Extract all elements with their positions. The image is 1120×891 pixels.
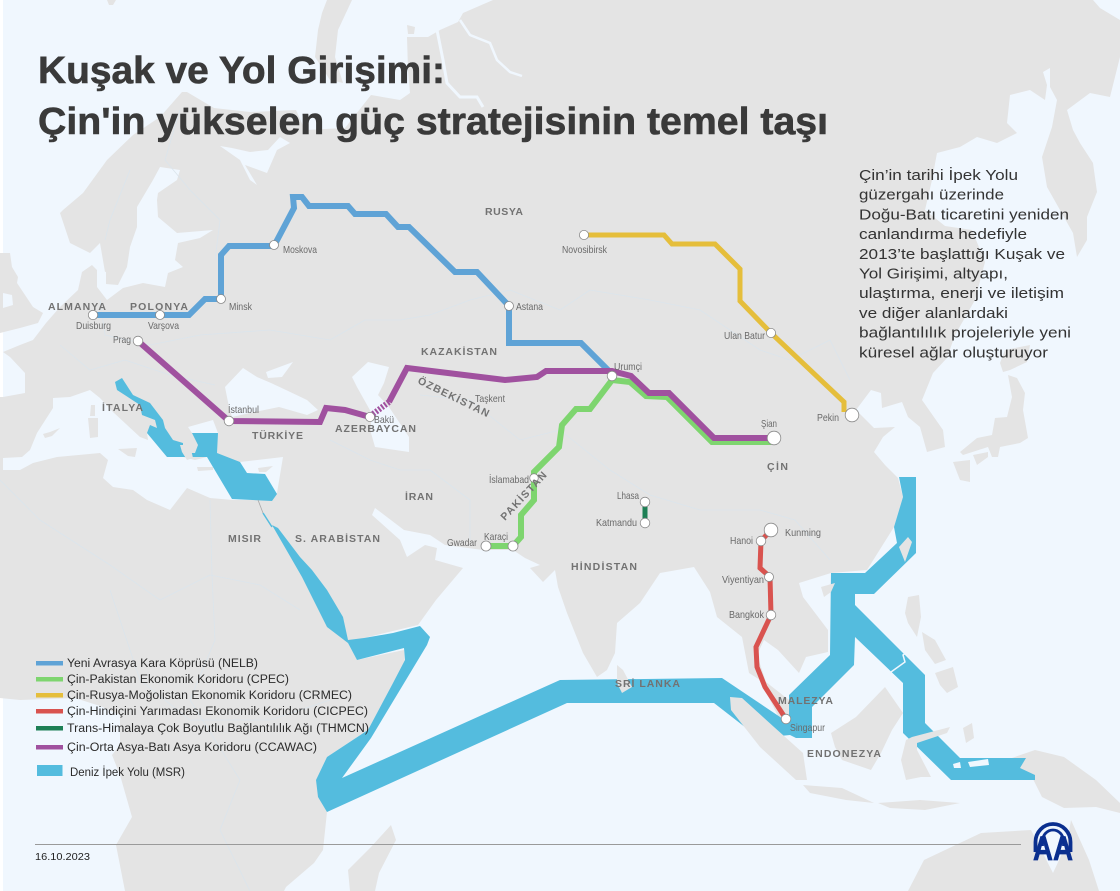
country labels: İRAN [405, 490, 433, 503]
route: CCAWAC [138, 341, 370, 422]
legend item: MSR [37, 765, 185, 779]
city labels: Katmandu [596, 517, 637, 529]
legend item: CPEC: Çin-Pakistan Ekonomik Koridoru (CPEC) [67, 674, 289, 686]
corridor routes [93, 197, 844, 719]
date: 16.10.2023 [35, 851, 90, 863]
legend item: MSR: Deniz İpek Yolu (MSR) [70, 766, 185, 779]
country labels: ALMANYA [48, 301, 106, 313]
city labels: Duisburg [76, 320, 111, 332]
route: CRMEC [584, 235, 844, 412]
country labels [48, 206, 881, 760]
intro text block: Doğu-Batı ticaretini yeniden [859, 206, 1069, 223]
maritime silk road (MSR) band [115, 378, 1035, 812]
city labels: İstanbul [228, 403, 259, 416]
legend [36, 658, 369, 779]
city labels: Şian [761, 418, 777, 430]
icon: AA logo: AA [1033, 830, 1073, 868]
city labels: Prag [113, 334, 131, 346]
country labels: POLONYA [130, 301, 188, 313]
legend item: CICPEC: Çin-Hindiçini Yarımadası Ekonomik Koridoru (CICPEC) [67, 706, 368, 718]
intro text block: güzergahı üzerinde [859, 187, 1004, 204]
title: Kuşak ve Yol Girişimi: [38, 50, 445, 92]
intro text block: ulaştırma, enerji ve iletişim [859, 285, 1064, 302]
city labels: İslamabad [489, 473, 529, 486]
city labels: Karaçi [484, 531, 508, 543]
city labels: Bakü [374, 414, 394, 426]
title [38, 50, 828, 143]
intro text block [859, 166, 1071, 361]
country labels: KAZAKİSTAN [421, 345, 497, 358]
country labels: ÖZBEKİSTAN [416, 374, 491, 420]
city labels: Kunming [785, 527, 821, 539]
country labels: S. ARABİSTAN [295, 532, 380, 545]
country labels: SRİ LANKA [615, 677, 680, 690]
intro text block: küresel ağlar oluşturuyor [859, 344, 1048, 361]
city labels: Astana [516, 301, 543, 313]
country labels: PAKİSTAN [498, 469, 549, 523]
city labels: Gwadar [447, 537, 477, 549]
route: CCAWAC hatched sea crossing [373, 402, 389, 414]
intro text block: 2013’te başlattığı Kuşak ve [859, 246, 1065, 263]
country labels: MALEZYA [778, 695, 833, 707]
intro text block: Çin’in tarihi İpek Yolu [859, 166, 1018, 184]
legend item: CCAWAC: Çin-Orta Asya-Batı Asya Koridoru (CCAWAC) [67, 742, 317, 754]
city labels: Hanoi [730, 535, 753, 547]
country labels: ENDONEZYA [807, 748, 881, 760]
intro text block: ve diğer alanlardaki [859, 305, 1008, 322]
title: Çin'in yükselen güç stratejisinin temel taşı [38, 101, 828, 143]
city labels: Singapur [790, 722, 825, 734]
city labels: Novosibirsk [562, 244, 608, 256]
legend item: CRMEC: Çin-Rusya-Moğolistan Ekonomik Koridoru (CRMEC) [67, 690, 352, 702]
route: CICPEC [756, 530, 786, 719]
city labels [76, 244, 839, 734]
legend item: NELB: Yeni Avrasya Kara Köprüsü (NELB) [67, 658, 258, 670]
route: CCAWAC east part [389, 368, 774, 438]
country labels: RUSYA [485, 206, 523, 218]
city labels: Bangkok [729, 609, 765, 621]
country labels: ÇİN [767, 460, 788, 473]
country labels: MISIR [228, 533, 261, 545]
route: CPEC [483, 380, 771, 546]
city labels: Taşkent [475, 393, 505, 405]
city labels: Minsk [229, 301, 253, 313]
city markers [88, 230, 859, 724]
country labels: TÜRKİYE [252, 429, 303, 442]
city labels: Moskova [283, 244, 317, 256]
legend item: THMCN: Trans-Himalaya Çok Boyutlu Bağlantılılık Ağı (THMCN) [67, 723, 369, 735]
country labels: AZERBAYCAN [335, 423, 416, 435]
intro text block: Yol Girişimi, altyapı, [859, 266, 1008, 282]
route: NELB [93, 197, 608, 370]
intro text block: bağlantılılık projeleriyle yeni [859, 325, 1071, 342]
city labels: Pekin [817, 412, 839, 424]
city labels: Viyentiyan [722, 574, 764, 586]
city labels: Varşova [148, 320, 179, 332]
country labels: HİNDİSTAN [571, 560, 637, 573]
city labels: Lhasa [617, 490, 639, 502]
intro text block: canlandırma hedefiyle [859, 226, 1027, 243]
city labels: Ulan Batur [724, 330, 765, 342]
city labels: Urumçi [614, 361, 642, 373]
country labels: İTALYA [102, 401, 143, 414]
route: THMCN [642, 502, 648, 523]
